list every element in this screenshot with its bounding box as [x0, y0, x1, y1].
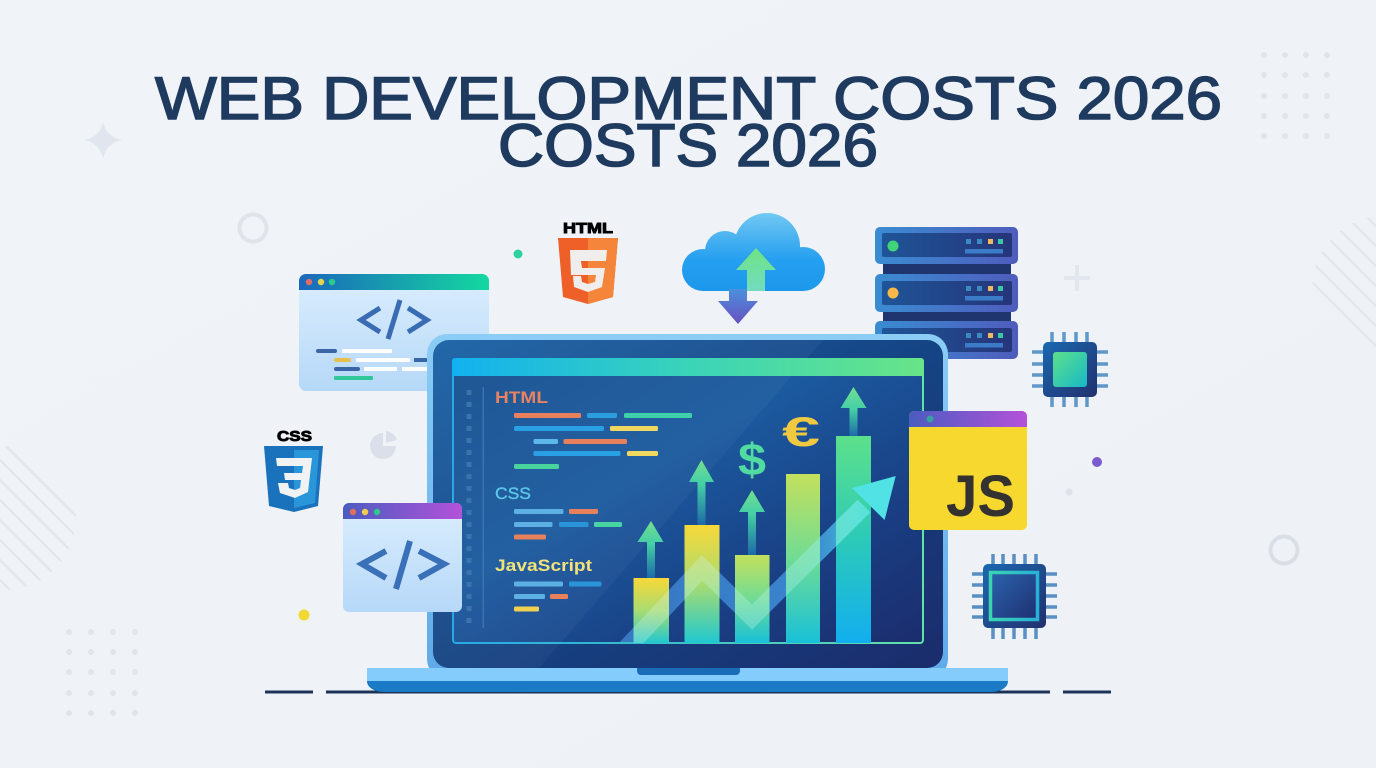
icon: microchip green	[1032, 332, 1108, 407]
icon: HTML5 badge: HTML	[563, 220, 613, 237]
currency symbol: dollar: $	[738, 434, 766, 485]
ground line	[265, 690, 1111, 694]
icon: microchip blue	[972, 554, 1057, 639]
code block: CSS: CSS	[495, 484, 531, 503]
icon: server rack	[875, 227, 1018, 359]
title: WEB DEVELOPMENT COSTS 2026	[155, 65, 1222, 132]
code block: JavaScript	[495, 556, 602, 612]
code block: JavaScript: JavaScript	[495, 556, 592, 575]
icon: code window top left	[299, 274, 489, 391]
icon: JS card	[909, 411, 1027, 530]
code block: HTML	[495, 388, 692, 469]
icon: cloud with up and down arrows	[682, 213, 825, 324]
trend arrow	[634, 476, 896, 643]
title	[155, 65, 1222, 179]
code editor gutter	[466, 387, 484, 628]
icon: JS card: JS	[946, 464, 1015, 529]
laptop base	[367, 668, 1008, 692]
title: COSTS 2026	[498, 112, 878, 179]
laptop lid frame	[427, 334, 948, 679]
laptop	[367, 334, 1008, 692]
code block: HTML: HTML	[495, 388, 548, 407]
icon: CSS3 badge: CSS	[277, 428, 312, 445]
icon: CSS3 badge	[264, 428, 323, 512]
code block: CSS	[495, 484, 622, 540]
currency symbol: euro: €	[782, 408, 820, 455]
icon: HTML5 badge	[558, 220, 618, 304]
icon: code window bottom left	[343, 503, 462, 612]
laptop screen	[433, 340, 924, 668]
bar chart	[620, 387, 871, 655]
laptop bezel	[433, 340, 943, 668]
